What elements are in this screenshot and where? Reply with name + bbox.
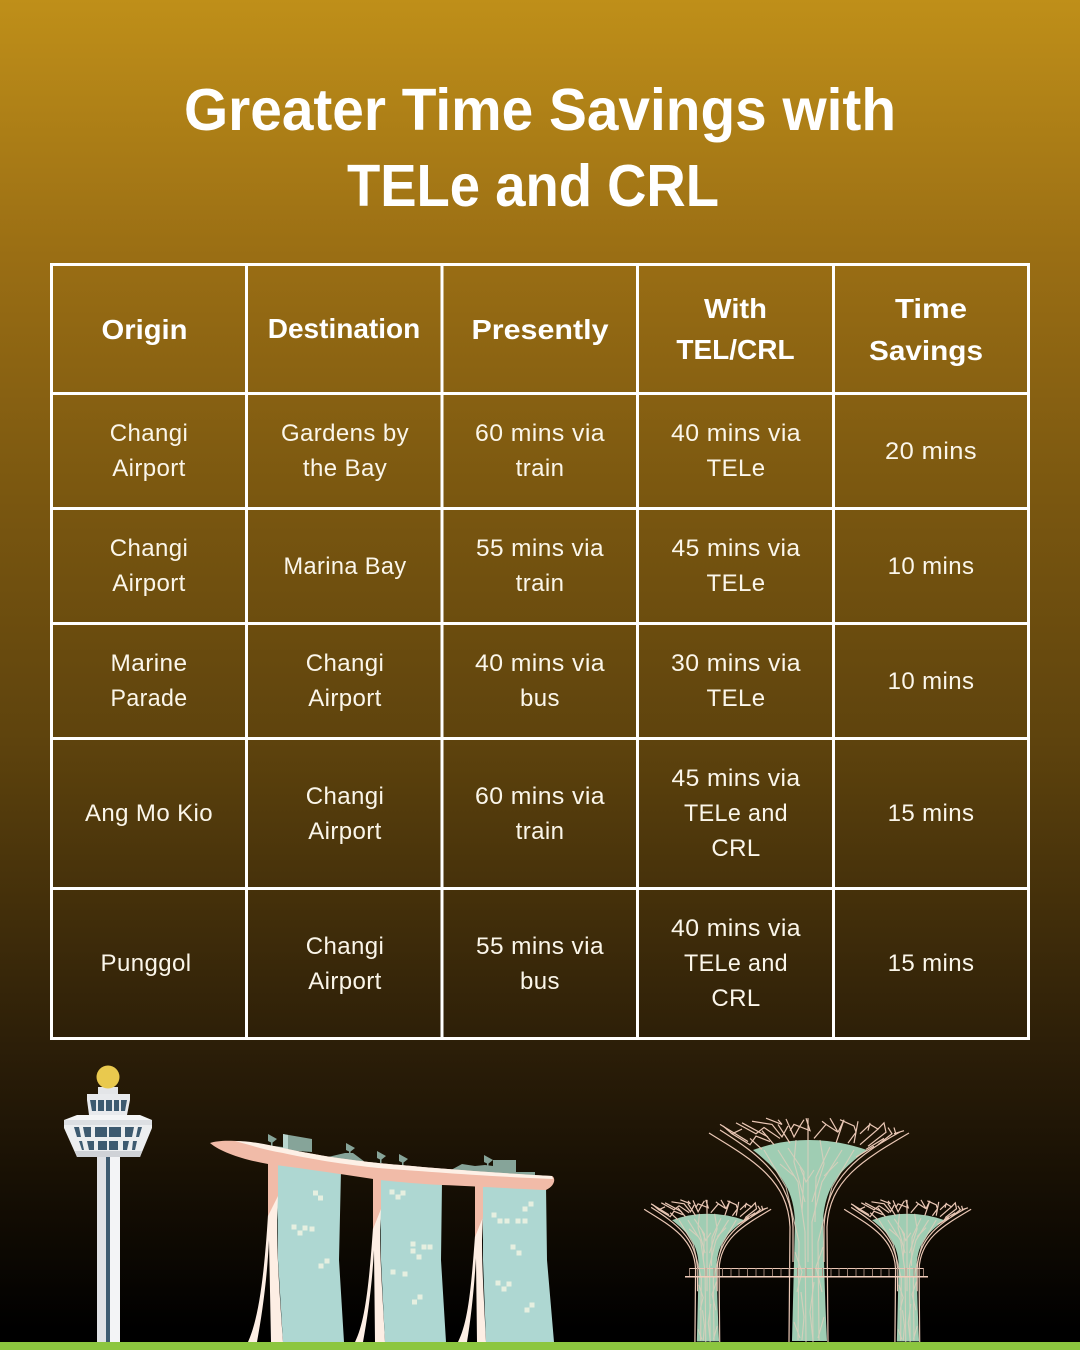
table header row: Presently <box>472 314 609 345</box>
row: Changi Airport to Gardens by the Bay: Gardens by <box>281 420 409 447</box>
row: Changi Airport to Marina Bay: 10 mins <box>888 553 974 580</box>
skyway bridge <box>685 1268 928 1277</box>
row: Marine Parade to Changi Airport: Changi <box>306 650 384 677</box>
row: Changi Airport to Marina Bay: Changi <box>110 535 188 562</box>
row: Punggol to Changi Airport: CRL <box>711 985 761 1012</box>
green ground strip <box>0 1342 1080 1350</box>
towers <box>277 1160 554 1342</box>
row: Punggol to Changi Airport: Airport <box>308 968 382 995</box>
row: Ang Mo Kio to Changi Airport: Airport <box>308 818 382 845</box>
row: Marine Parade to Changi Airport <box>110 650 974 712</box>
row: Changi Airport to Gardens by the Bay: Airport <box>112 455 186 482</box>
row: Ang Mo Kio to Changi Airport: 45 mins via <box>672 765 801 792</box>
supertree: right <box>844 1200 971 1342</box>
title: Greater Time Savings with <box>184 77 896 143</box>
row: Changi Airport to Gardens by the Bay: the Bay <box>303 455 387 482</box>
title <box>184 77 896 219</box>
row: Marine Parade to Changi Airport: 40 mins via <box>475 650 605 677</box>
row: Changi Airport to Marina Bay: train <box>516 570 564 597</box>
row: Marine Parade to Changi Airport: Airport <box>308 685 382 712</box>
supertree: centre <box>709 1118 909 1342</box>
row: Changi Airport to Gardens by the Bay: 40 mins via <box>671 420 801 447</box>
leg tops <box>268 1160 483 1237</box>
row: Ang Mo Kio to Changi Airport <box>85 765 974 862</box>
tower legs <box>248 1195 486 1342</box>
rooftop garden <box>263 1134 535 1177</box>
row: Changi Airport to Gardens by the Bay: train <box>516 455 564 482</box>
row: Punggol to Changi Airport <box>101 915 974 1012</box>
row: Changi Airport to Marina Bay: 45 mins via <box>672 535 801 562</box>
row: Changi Airport to Gardens by the Bay: 60 mins via <box>475 420 605 447</box>
icon: Changi control tower <box>64 1066 152 1342</box>
row: Marine Parade to Changi Airport: 30 mins via <box>671 650 801 677</box>
row: Punggol to Changi Airport: 40 mins via <box>671 915 801 942</box>
row: Ang Mo Kio to Changi Airport: Changi <box>306 783 384 810</box>
row: Changi Airport to Gardens by the Bay: TELe <box>707 455 765 482</box>
row: Ang Mo Kio to Changi Airport: 15 mins <box>888 800 974 827</box>
row: Ang Mo Kio to Changi Airport: 60 mins via <box>475 783 605 810</box>
table grid <box>51 264 1029 1039</box>
row: Punggol to Changi Airport: Punggol <box>101 950 191 977</box>
row: Marine Parade to Changi Airport: 10 mins <box>888 668 974 695</box>
row: Marine Parade to Changi Airport: Marine <box>110 650 188 677</box>
row: Changi Airport to Gardens by the Bay: 20 mins <box>885 438 977 465</box>
row: Punggol to Changi Airport: 15 mins <box>888 950 974 977</box>
row: Changi Airport to Marina Bay <box>110 535 974 597</box>
row: Changi Airport to Marina Bay: Airport <box>112 570 186 597</box>
table header row: Time <box>895 293 967 324</box>
row: Changi Airport to Marina Bay: 55 mins via <box>476 535 604 562</box>
table header row <box>102 293 983 366</box>
table header row: With <box>704 293 767 324</box>
row: Ang Mo Kio to Changi Airport: train <box>516 818 564 845</box>
tower windows <box>292 1190 534 1312</box>
table header row: Origin <box>102 314 188 345</box>
row: Punggol to Changi Airport: 55 mins via <box>476 933 604 960</box>
row: Marine Parade to Changi Airport: bus <box>520 685 560 712</box>
table header row: Destination <box>268 313 420 344</box>
table header row: TEL/CRL <box>676 334 795 365</box>
row: Ang Mo Kio to Changi Airport: CRL <box>711 835 761 862</box>
row: Ang Mo Kio to Changi Airport: Ang Mo Kio <box>85 800 213 827</box>
deck <box>210 1141 554 1190</box>
row: Changi Airport to Gardens by the Bay: Changi <box>110 420 188 447</box>
row: Punggol to Changi Airport: TELe and <box>684 950 788 977</box>
title: TELe and CRL <box>347 153 719 219</box>
row: Ang Mo Kio to Changi Airport: TELe and <box>684 800 788 827</box>
row: Punggol to Changi Airport: bus <box>520 968 560 995</box>
row: Changi Airport to Gardens by the Bay <box>110 420 977 482</box>
row: Marine Parade to Changi Airport: TELe <box>707 685 765 712</box>
icon: Marina Bay Sands <box>210 1134 554 1342</box>
icon: Gardens by the Bay supertrees <box>644 1118 971 1342</box>
row: Punggol to Changi Airport: Changi <box>306 933 384 960</box>
row: Changi Airport to Marina Bay: TELe <box>707 570 765 597</box>
table header row: Savings <box>869 335 983 366</box>
supertree: left <box>644 1200 771 1342</box>
table: journey time savings <box>51 264 1029 1039</box>
row: Changi Airport to Marina Bay: Marina Bay <box>284 553 406 580</box>
row: Marine Parade to Changi Airport: Parade <box>110 685 188 712</box>
